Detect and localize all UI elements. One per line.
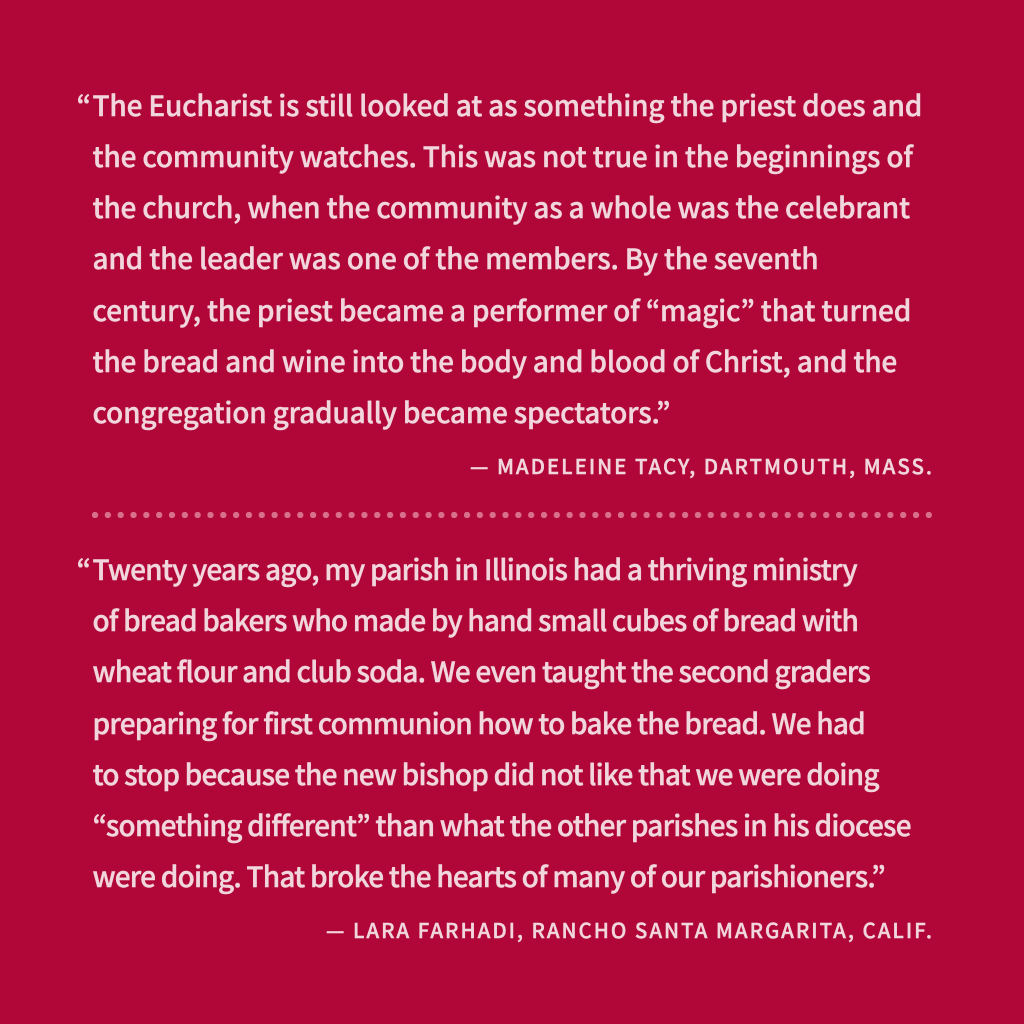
quote line 2: the community watches. This was not true in the beginnings of [92, 136, 913, 176]
quote line 3: the church, when the community as a whole was the celebrant [92, 187, 910, 227]
attribution: — LARA FARHADI, RANCHO SANTA MARGARITA, CALIF. [326, 914, 934, 944]
dotted divider [92, 512, 932, 518]
opening quotation mark: “ [76, 549, 91, 589]
quote line 2: of bread bakers who made by hand small cubes of bread with [92, 600, 858, 640]
opening quotation mark: “ [76, 85, 91, 125]
quote line 5: century, the priest became a performer of “magic” that turned [92, 290, 911, 330]
quote line 7: were doing. That broke the hearts of many of our parishioners.” [92, 856, 885, 896]
quote line 3: wheat flour and club soda. We even taught the second graders [92, 651, 870, 691]
quote: Madeleine Tacy [76, 85, 934, 480]
quote line 7: congregation gradually became spectators.” [92, 392, 670, 432]
attribution: — MADELEINE TACY, DARTMOUTH, MASS. [470, 450, 934, 480]
quote line 6: “something different” than what the other parishes in his diocese [92, 805, 911, 845]
quote line 6: the bread and wine into the body and blood of Christ, and the [92, 341, 897, 381]
quote line 4: preparing for first communion how to bake the bread. We had [92, 703, 865, 743]
quote line 1: Twenty years ago, my parish in Illinois had a thriving ministry [92, 549, 857, 589]
quote line 5: to stop because the new bishop did not like that we were doing [92, 754, 879, 794]
quote line 1: The Eucharist is still looked at as something the priest does and [92, 85, 922, 125]
quote line 4: and the leader was one of the members. By the seventh [92, 238, 818, 278]
